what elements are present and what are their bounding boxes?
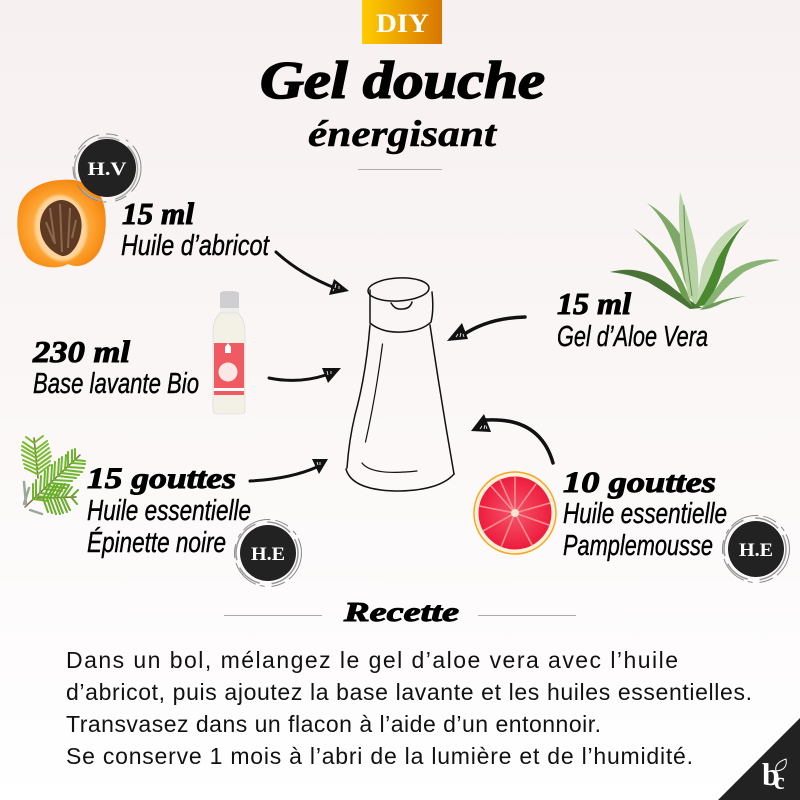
ingredient: black spruce essential oil: Épinette noire [87,526,226,559]
badge: H.E spruce [234,520,302,586]
corner logo [718,718,800,800]
badge: DIY: DIY [376,9,429,38]
icon: apricot half [17,180,106,267]
badge: H.E grapefruit [722,516,790,582]
recipe text: Se conserve 1 mois à l’abri de la lumière et de l’humidité. [66,743,693,769]
recipe text: d’abricot, puis ajoutez la base lavante et les huiles essentielles. [66,679,752,705]
corner logo: c [774,769,785,795]
badge: DIY [362,0,442,44]
ingredient: grapefruit essential oil: Pamplemousse [563,530,713,562]
title rule [358,168,442,170]
heading: recipe: Recette [343,597,459,627]
ingredient: black spruce essential oil: Huile essentielle [87,495,251,527]
corner logo: b [762,756,780,792]
icon: spruce branch [22,436,85,514]
arrow: grapefruit oil to bottle [471,414,553,463]
arrow: apricot oil to bottle [276,252,349,295]
badge: H.V: H.V [88,159,127,180]
badge: H.E spruce: H.E [251,544,285,565]
recipe text: Dans un bol, mélangez le gel d’aloe vera avec l’huile [66,647,678,673]
ingredient: black spruce essential oil [87,462,251,559]
ingredient: grapefruit essential oil: Huile essentielle [563,498,727,530]
ingredient: apricot oil [121,196,271,262]
icon: shower gel bottle sketch [346,276,454,491]
ingredient: apricot oil: 15 ml [122,196,194,231]
ingredient: black spruce essential oil: 15 gouttes [87,462,236,495]
badge: H.V [73,134,141,202]
title: Gel douche [260,52,545,110]
arrow: washing base to bottle [269,368,341,383]
arrow: aloe gel to bottle [447,317,525,341]
arrow: spruce oil to bottle [250,459,328,481]
ingredient: grapefruit essential oil: 10 gouttes [563,466,716,499]
ingredient: aloe vera gel [557,286,708,353]
ingredient: aloe vera gel: 15 ml [557,286,631,321]
ingredient: grapefruit essential oil [563,466,727,562]
recipe text [66,647,752,769]
ingredient: washing base: Base lavante Bio [33,368,199,400]
ingredient: apricot oil: Huile d’abricot [121,230,271,262]
subtitle: énergisant [308,114,498,155]
icon: washing base bottle [213,291,245,414]
ingredient: aloe vera gel: Gel d’Aloe Vera [557,321,708,353]
icon: grapefruit slice [474,472,556,554]
badge: H.E grapefruit: H.E [739,540,773,561]
recipe text: Transvasez dans un flacon à l’aide d’un entonnoir. [66,711,601,737]
ingredient: washing base [32,334,199,400]
icon: aloe vera plant [610,192,780,310]
ingredient: washing base: 230 ml [32,334,130,369]
